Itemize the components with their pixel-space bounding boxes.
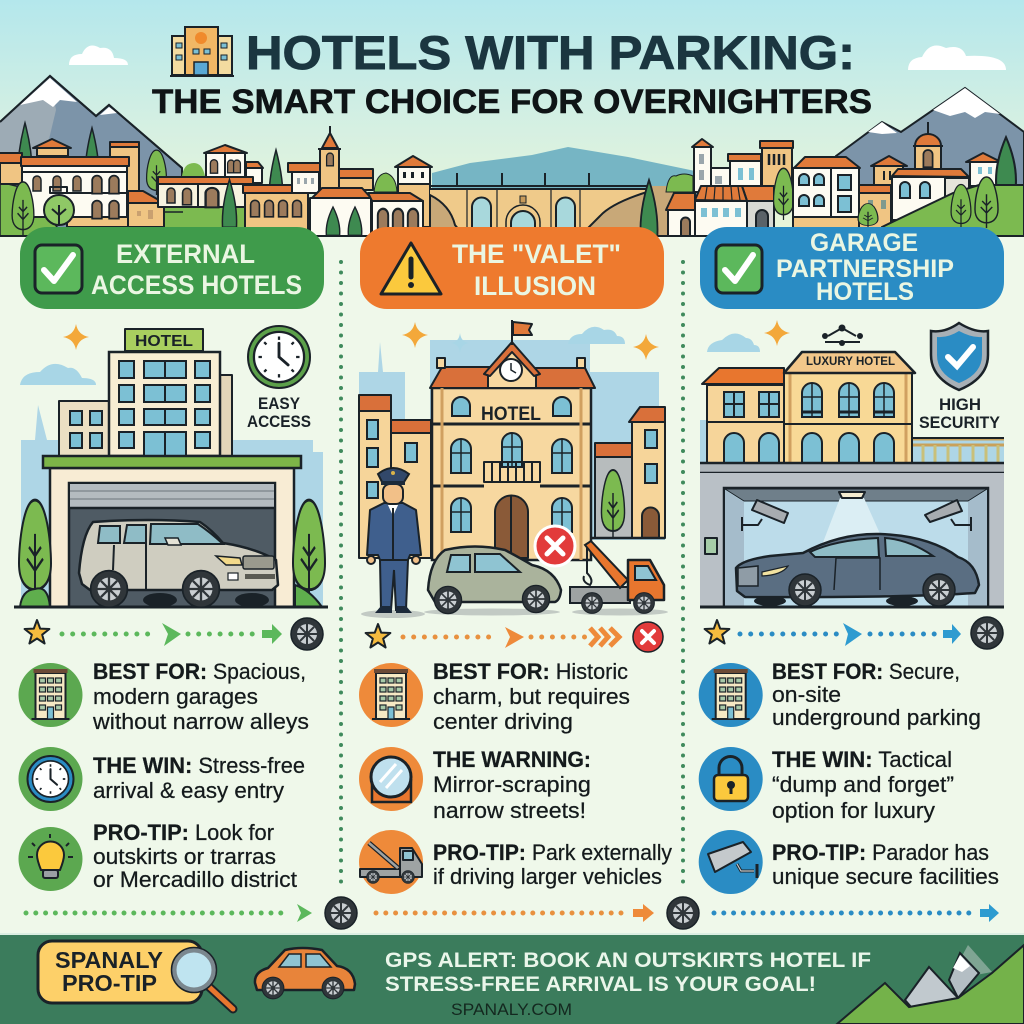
icon: tow truck [359, 830, 423, 894]
text: best for [92, 659, 309, 734]
route arrow 1 [25, 618, 323, 650]
list: valet [359, 659, 672, 894]
heading: PARTNERSHIP [776, 255, 954, 283]
title: HOTELS WITH PARKING: [246, 26, 855, 79]
icon: hotel [18, 663, 82, 727]
text: best for: charm, but requires [433, 684, 630, 709]
bottom route arrows [26, 897, 999, 929]
icon: check [35, 245, 82, 293]
mountains [837, 945, 1024, 1024]
icon: hotel [359, 663, 423, 727]
heading [91, 239, 302, 300]
text: best for: on-site [772, 682, 841, 707]
hotel sign: HOTEL [135, 333, 193, 350]
icon: shield with high security [919, 323, 1001, 432]
text: the win: arrival & easy entry [93, 778, 284, 803]
icon: check [716, 245, 762, 293]
icon: security camera [699, 830, 763, 894]
heading: THE "VALET" [452, 239, 621, 269]
subtitle: THE SMART CHOICE FOR OVERNIGHTERS [152, 83, 872, 121]
camera left [742, 500, 788, 531]
text: pro-tip: or Mercadillo district [93, 867, 297, 892]
sky [0, 0, 1024, 236]
text: pro-tip: if driving larger vehicles [433, 864, 662, 889]
skyline illustration [0, 76, 1024, 236]
icon: light bulb [18, 827, 82, 891]
icon: warning [381, 243, 441, 294]
icon: x [633, 622, 663, 652]
website: SPANALY.COM [451, 1001, 572, 1019]
alert text [385, 948, 871, 996]
camera right [925, 500, 971, 531]
icon: magnifier [172, 948, 233, 1009]
left mountains [0, 76, 182, 236]
alert text: STRESS-FREE ARRIVAL IS YOUR GOAL! [385, 972, 816, 996]
text: the win: “dump and forget” [772, 772, 954, 797]
text: best for: center driving [433, 709, 573, 734]
text: best for [433, 659, 630, 734]
bridge [430, 173, 650, 236]
text: the win [772, 747, 954, 823]
list: external access [18, 659, 309, 892]
hotel sign [125, 329, 203, 351]
icon: mirror [359, 747, 423, 811]
cloud [707, 333, 760, 352]
text: the warning [433, 747, 591, 823]
text: the warning: THE WARNING: [433, 747, 591, 772]
icon: crown [822, 324, 863, 346]
text: pro-tip [433, 840, 672, 889]
icon: clock with easy access: EASY [258, 394, 301, 413]
alert text: GPS ALERT: BOOK AN OUTSKIRTS HOTEL IF [385, 948, 871, 972]
hotel building [430, 320, 595, 560]
badge [38, 941, 202, 1003]
icon: clock with easy access [247, 326, 311, 431]
text: pro-tip [93, 820, 297, 892]
list: garage [699, 659, 999, 894]
text: the warning: narrow streets! [433, 798, 586, 823]
heading: GARAGE [810, 229, 918, 257]
clouds [69, 45, 1006, 70]
icon: shield with high security: HIGH [939, 395, 981, 414]
cloud [568, 327, 625, 344]
heading [776, 229, 954, 306]
text: best for: BEST FOR: Secure, [772, 659, 960, 684]
scene: valet illusion [359, 320, 668, 618]
dividers [341, 262, 683, 885]
garage door [69, 483, 275, 607]
text: pro-tip: unique secure facilities [772, 864, 999, 889]
text: pro-tip: PRO-TIP: Parador has [772, 840, 989, 865]
hotel building: HOTEL [481, 404, 541, 425]
route arrow 2 [366, 622, 663, 652]
luxury sign [784, 352, 915, 373]
icon: hotel [170, 27, 234, 76]
icon: padlock [699, 747, 763, 811]
scene: garage partnership [700, 320, 1004, 607]
car: sedan [736, 534, 979, 606]
garage interior [724, 488, 988, 607]
car: suv [79, 520, 278, 607]
tow truck [570, 541, 668, 616]
text: pro-tip [772, 840, 999, 889]
text: best for [772, 659, 981, 730]
icon: clock with easy access: ACCESS [247, 412, 311, 431]
text: the win: THE WIN: Tactical [772, 747, 952, 772]
badge: PRO-TIP [62, 970, 157, 996]
centre mountain [432, 147, 700, 236]
heading [452, 239, 621, 301]
badge: SPANALY [55, 947, 163, 973]
heading: ACCESS HOTELS [91, 270, 302, 300]
small car [424, 546, 561, 616]
text: pro-tip: PRO-TIP: Park externally [433, 840, 672, 865]
right mountains [836, 88, 1024, 236]
heading: EXTERNAL [116, 239, 255, 269]
fence [912, 438, 1004, 463]
text: pro-tip: PRO-TIP: Look for [93, 820, 274, 845]
text: best for: underground parking [772, 705, 981, 730]
heading: ILLUSION [474, 271, 596, 301]
heading: HOTELS [816, 278, 914, 306]
text: best for: without narrow alleys [92, 709, 309, 734]
text: the win: option for luxury [772, 798, 935, 823]
panel: valet illusion header [360, 227, 664, 309]
icon: clock [18, 747, 82, 811]
panel: garage partnership header [700, 227, 1004, 309]
cloud [20, 364, 96, 385]
icon: x [535, 526, 575, 566]
luxury sign: LUXURY HOTEL [806, 356, 895, 368]
valet figure [361, 468, 425, 618]
footer band [0, 933, 1024, 1024]
icon: shield with high security: SECURITY [919, 413, 1001, 432]
text: pro-tip: outskirts or trarras [93, 844, 276, 869]
scene: external access hotel [14, 324, 328, 607]
text: the win: THE WIN: Stress-free [93, 753, 305, 778]
text: best for: BEST FOR: Spacious, [93, 659, 306, 684]
icon: hotel [699, 663, 763, 727]
text: the warning: Mirror-scraping [433, 772, 591, 797]
panel: external access hotels header [20, 227, 324, 309]
icon: orange car [255, 948, 355, 999]
text: best for: BEST FOR: Historic [433, 659, 628, 684]
text: best for: modern garages [93, 684, 258, 709]
route arrow 3 [705, 617, 1003, 649]
text: the win [93, 753, 305, 803]
